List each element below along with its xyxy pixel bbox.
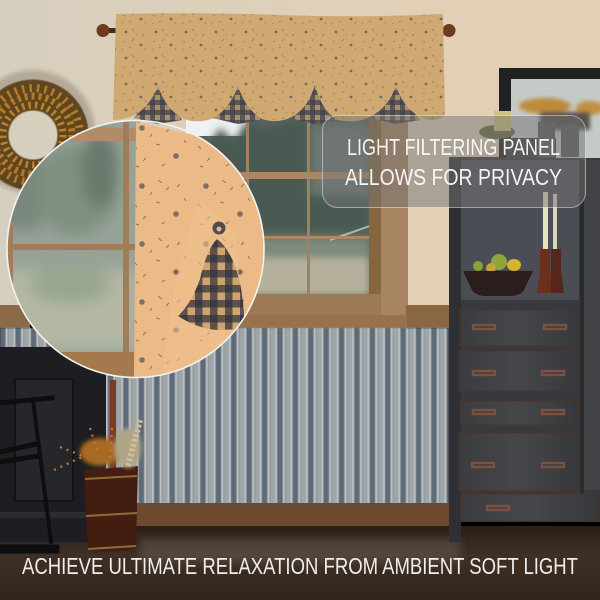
black stool xyxy=(0,398,55,549)
dried flower bouquet xyxy=(54,420,141,470)
black cabinet xyxy=(0,347,106,542)
lens window view xyxy=(8,121,140,352)
framed picture xyxy=(499,68,600,158)
drawers xyxy=(459,310,600,521)
scalloped valance xyxy=(113,13,445,121)
plaid scallop insets xyxy=(134,83,420,124)
baseboard xyxy=(135,503,449,528)
wreath xyxy=(0,76,89,188)
lens curtain fabric xyxy=(134,122,270,377)
lens mullions xyxy=(7,120,136,380)
corrugated metal wainscot xyxy=(0,328,449,504)
bowl of fruit xyxy=(463,254,533,296)
dresser xyxy=(449,157,600,542)
curtain rod with left finial xyxy=(96,24,118,37)
churn bucket with dowel xyxy=(84,380,138,552)
panel heading line 2: ALLOWS FOR PRIVACY xyxy=(345,164,562,190)
window frame and casing xyxy=(0,116,449,348)
wall xyxy=(0,0,600,320)
translucent text panel xyxy=(322,116,586,208)
candlesticks xyxy=(537,192,564,293)
window view with forest xyxy=(186,116,370,296)
drawer handles xyxy=(472,325,566,510)
lens plaid tieback xyxy=(178,222,244,330)
shelf decor: candle and jars xyxy=(479,111,579,157)
floor xyxy=(0,526,600,600)
magnified detail circle xyxy=(0,120,270,380)
curtain rod with right finial xyxy=(440,24,456,37)
